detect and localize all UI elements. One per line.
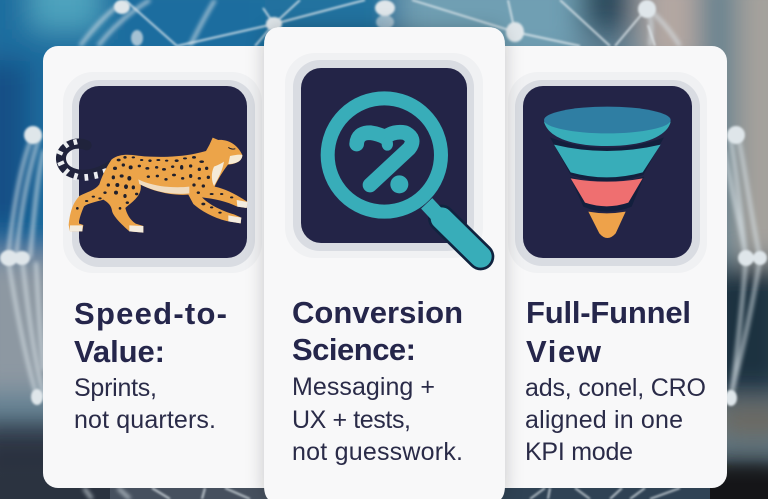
heading: Speed-to-Value: Value:: [74, 334, 165, 369]
text: sprints, not quarters: [74, 374, 216, 434]
heading: Speed-to-Value: Speed-to-: [74, 296, 227, 331]
icon: cheetah on dark tile: [57, 72, 262, 273]
heading: Speed-to-Value: [74, 296, 227, 369]
text: ads, conel, CRO aligned in one KPI mode: aligned in one: [525, 406, 683, 434]
panel: conversion science card: [264, 27, 505, 499]
text: messaging + UX + tests, not guesswork: [292, 373, 463, 466]
heading: Full-Funnel View: View: [526, 334, 602, 369]
heading: Full-Funnel View: [526, 295, 691, 369]
text: messaging + UX + tests, not guesswork: Messaging +: [292, 373, 435, 401]
icon: funnel on dark tile: [508, 72, 707, 273]
text: ads, conel, CRO aligned in one KPI mode: KPI mode: [525, 438, 633, 466]
icon: magnifying glass on dark tile: [285, 53, 483, 258]
text: messaging + UX + tests, not guesswork: UX + tests,: [292, 406, 411, 434]
text: ads, conel, CRO aligned in one KPI mode: ads, conel, CRO: [525, 374, 706, 402]
text: ads, conel, CRO aligned in one KPI mode: [525, 374, 706, 466]
heading: Conversion Science: Conversion: [292, 295, 463, 330]
network lines near: [125, 0, 680, 499]
heading: Conversion Science: [292, 295, 463, 367]
text: sprints, not quarters: Sprints,: [74, 374, 157, 402]
heading: Full-Funnel View: Full-Funnel: [526, 295, 691, 330]
heading: Conversion Science: Science:: [292, 332, 416, 367]
text: sprints, not quarters: not quarters.: [74, 406, 216, 434]
panel: speed-to-value card: [43, 46, 283, 488]
panel: full-funnel view card: [490, 46, 727, 488]
text: messaging + UX + tests, not guesswork: not guesswork.: [292, 438, 463, 466]
